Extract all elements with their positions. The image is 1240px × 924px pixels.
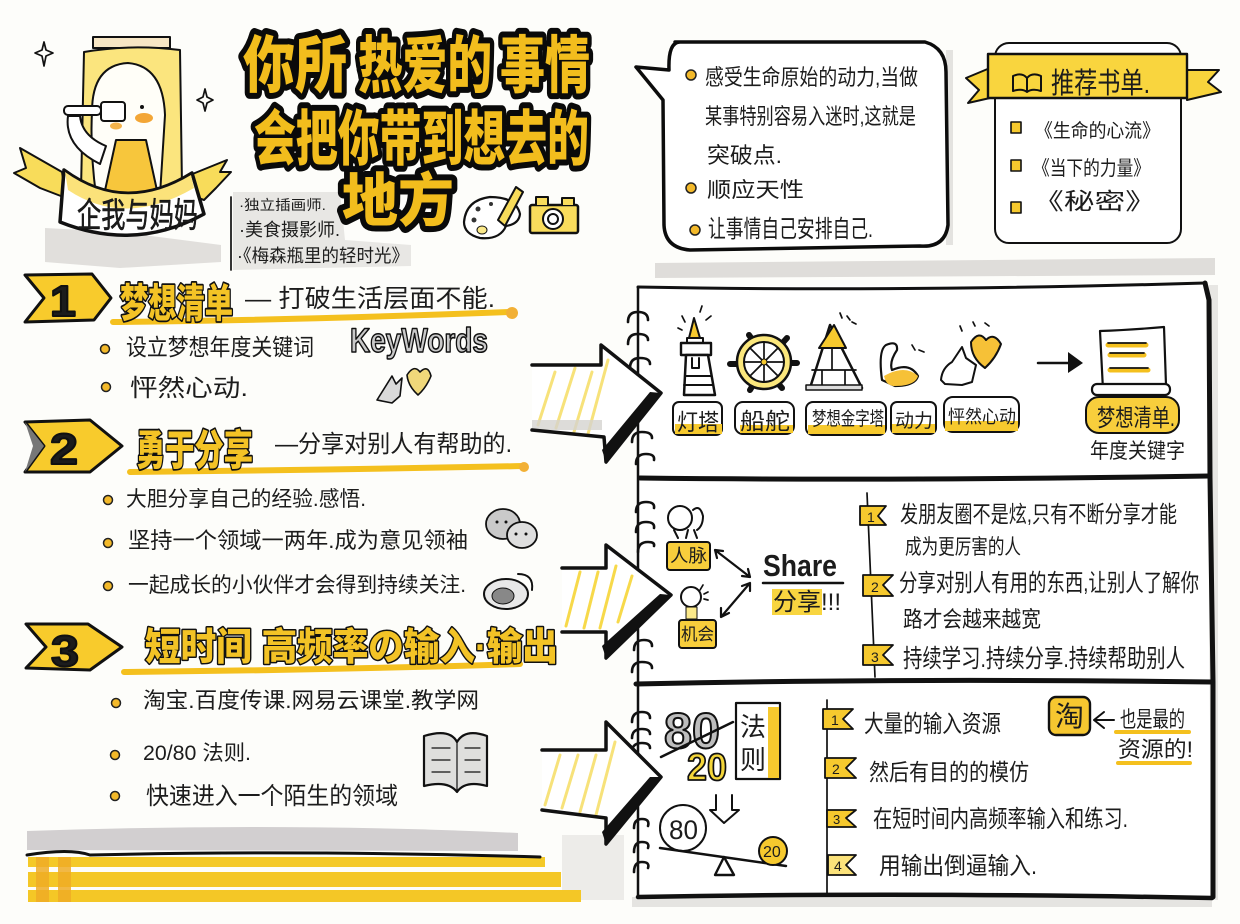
section 2 heading: 2 <box>50 425 78 474</box>
title: 地方 <box>342 169 454 234</box>
panel: recommended books: 《当下的力量》 <box>1033 157 1150 180</box>
arrow 2 <box>562 545 671 658</box>
share heading: 分享!!! <box>773 589 841 616</box>
arrow 1 <box>532 345 661 462</box>
law list: 然后有目的的模仿 <box>869 759 1029 785</box>
share list: 成为更厉害的人 <box>905 536 1021 559</box>
law list: 大量的输入资源 <box>864 711 1001 738</box>
seesaw: 80 vs 20 <box>660 805 787 875</box>
spiral binding <box>628 312 654 872</box>
icon: hand heart <box>377 369 431 403</box>
section 1 heading: 1 <box>50 277 76 326</box>
arrows: people and chance <box>715 550 750 617</box>
label: dream pyramid <box>806 402 886 435</box>
section 1 list: 怦然心动. <box>130 375 248 402</box>
share list: 1 <box>867 509 875 525</box>
icon: dream list scroll <box>1092 327 1170 395</box>
panel: notebook frame <box>636 283 1213 898</box>
panel: recommended books: 《秘密》 <box>1033 188 1156 214</box>
80 law illustration: 20 <box>687 747 727 789</box>
seesaw: 80 vs 20: 80 <box>669 815 698 845</box>
author bio <box>231 197 409 270</box>
section 3 heading <box>26 624 558 676</box>
section 3 list: 20/80 法则. <box>143 742 251 765</box>
icon: lightbulb: 机会 <box>681 625 714 644</box>
section 2 list <box>104 488 468 597</box>
icon: lightbulb <box>679 585 716 648</box>
label: lighthouse: 灯塔 <box>677 409 719 435</box>
section 1 heading <box>25 274 518 326</box>
speech bubble quote: 感受生命原始的动力,当做 <box>705 65 918 90</box>
taobao note: 也是最的 <box>1120 707 1185 732</box>
section 3 list <box>110 688 479 810</box>
section 3 heading: 3 <box>51 627 79 676</box>
author bio: ·《梅森瓶里的轻时光》 <box>237 246 409 266</box>
icon: lighthouse <box>678 306 715 395</box>
law list: 用输出倒逼输入. <box>879 853 1037 880</box>
speech bubble quote: 让事情自己安排自己. <box>708 216 873 243</box>
title: 会把你带到想去的 <box>254 106 589 173</box>
section 2 list: 一起成长的小伙伴才会得到持续关注. <box>128 574 466 597</box>
title: 事情 <box>500 32 590 101</box>
label: rudder <box>735 402 794 434</box>
panel: recommended books: 《生命的心流》 <box>1035 120 1160 142</box>
speech bubble quote: 顺应天性 <box>707 179 804 202</box>
section 2 heading <box>25 420 529 474</box>
taobao note: 资源的! <box>1118 737 1193 762</box>
share list <box>860 493 1199 677</box>
section 1 list <box>100 334 314 402</box>
icon: flexed arm <box>881 343 924 386</box>
label: dream pyramid: 梦想金字塔 <box>812 408 884 430</box>
80 law illustration: 法 <box>740 712 766 742</box>
author bio: ·独立插画师. <box>239 197 326 213</box>
share list: 3 <box>871 649 879 665</box>
taobao note <box>1049 697 1193 763</box>
arrow 3 <box>542 722 661 844</box>
label: heart throb <box>944 397 1019 432</box>
label: dream list <box>1086 397 1185 463</box>
title: 热爱的 <box>358 32 492 101</box>
law list: 1 <box>831 712 839 728</box>
icon: people <box>667 506 710 570</box>
section 3 list: 淘宝.百度传课.网易云课堂.教学网 <box>143 688 479 713</box>
icon: speech bubbles <box>486 509 537 548</box>
label: dream list: 梦想清单. <box>1097 405 1175 432</box>
share heading: Share <box>763 548 837 583</box>
section 1 heading: — 打破生活层面不能. <box>245 285 495 313</box>
section 3 list: 快速进入一个陌生的领域 <box>146 783 398 810</box>
80 law illustration <box>661 703 780 823</box>
80 law illustration: 80 <box>664 703 720 759</box>
section 2 list: 坚持一个领域一两年.成为意见领袖 <box>128 528 468 553</box>
law list: 2 <box>832 761 840 777</box>
section 2 heading: 勇于分享 <box>136 427 253 474</box>
icon: hand holding heart <box>941 322 1001 385</box>
law list: 在短时间内高频率输入和练习. <box>873 806 1128 833</box>
law list: 3 <box>833 812 840 827</box>
section 2 heading: —分享对别人有帮助的. <box>275 431 512 458</box>
speech bubble quote: 突破点. <box>707 143 782 168</box>
label: motivation <box>891 402 936 434</box>
section 1 list: 设立梦想年度关键词 <box>126 334 314 360</box>
icon: ship wheel <box>730 335 797 390</box>
illustration: girl with camera and ribbon <box>14 37 231 235</box>
icon: open book <box>424 733 487 792</box>
taobao note: 淘 <box>1055 701 1084 732</box>
title: 你所 <box>243 32 347 101</box>
icon: palette and brush <box>464 187 523 238</box>
panel: recommended books <box>966 43 1221 243</box>
speech bubble quote <box>636 42 948 250</box>
author bio: ·美食摄影师. <box>239 220 340 240</box>
arrow: to dream list <box>1038 352 1083 373</box>
section 2 list: 大胆分享自己的经验.感悟. <box>126 488 366 511</box>
speech bubble quote: 某事特别容易入迷时,这就是 <box>705 104 916 129</box>
ribbon name: 企我与妈妈 <box>77 197 198 235</box>
icon: sparkles <box>35 42 213 111</box>
panel: recommended books: 推荐书单. <box>1051 67 1150 100</box>
section 1 heading: 梦想清单 <box>120 282 233 326</box>
share heading <box>763 548 843 616</box>
icon: weibo <box>484 574 532 609</box>
key words lettering: KeyWords <box>350 322 488 360</box>
label: rudder: 船舵 <box>740 408 790 434</box>
bottom tape <box>27 852 581 902</box>
label: dream list: 年度关键字 <box>1090 440 1185 463</box>
icon: camera <box>530 197 578 233</box>
80 law illustration: 则 <box>740 745 766 775</box>
share list: 2 <box>871 579 879 595</box>
label: motivation: 动力 <box>895 410 933 432</box>
icon: people: 人脉 <box>670 546 707 566</box>
law list: 4 <box>834 858 842 874</box>
share list: 路才会越来越宽 <box>903 607 1041 632</box>
law list <box>823 700 1128 893</box>
label: heart throb: 怦然心动 <box>948 407 1016 427</box>
section 3 heading: 短时间 高频率の输入·输出 <box>145 627 558 669</box>
icon: pyramid <box>806 313 862 390</box>
seesaw: 80 vs 20: 20 <box>763 844 781 861</box>
title <box>243 32 590 234</box>
